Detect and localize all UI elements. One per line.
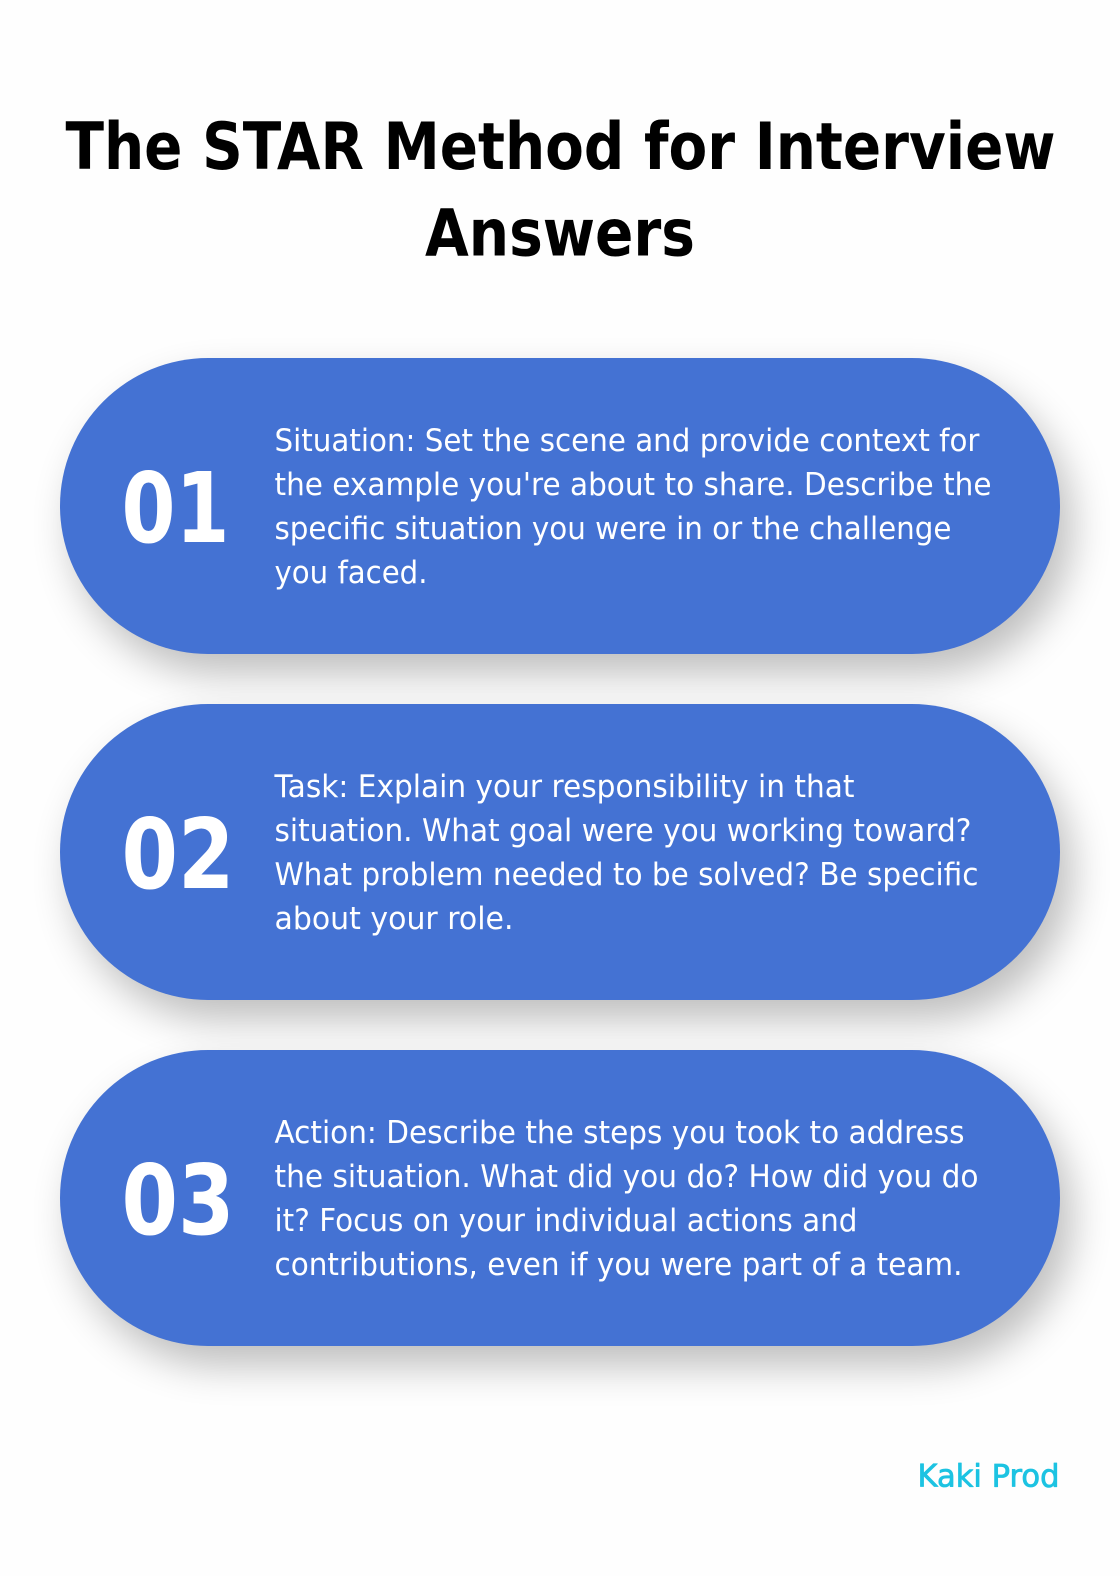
text: situation: Situation: Set the scene and provide context for xyxy=(274,423,980,459)
logo: Kaki Prod: Kaki Prod xyxy=(918,1458,1060,1494)
text: action: the situation. What did you do? How did you do xyxy=(274,1159,978,1195)
text: task: What problem needed to be solved? Be specific xyxy=(274,857,978,893)
number 01: 01 xyxy=(122,452,230,565)
text: action xyxy=(274,1115,978,1283)
number 03: 03 xyxy=(122,1144,234,1257)
text: task: about your role. xyxy=(274,901,514,937)
text: action: contributions, even if you were part of a team. xyxy=(274,1247,962,1283)
panel: step 01 situation xyxy=(60,358,1072,674)
number 02: 02 xyxy=(122,798,234,911)
panel: step 03 action xyxy=(60,1050,1072,1366)
text: situation: you faced. xyxy=(274,555,428,591)
text: task xyxy=(274,769,978,937)
text: situation: specific situation you were in or the challenge xyxy=(274,511,952,547)
text: task: situation. What goal were you working toward? xyxy=(274,813,972,849)
panel: step 02 task xyxy=(60,704,1072,1020)
title xyxy=(66,110,1056,272)
text: situation: the example you're about to share. Describe the xyxy=(274,467,992,503)
text: action: Action: Describe the steps you took to address xyxy=(274,1115,964,1151)
text: task: Task: Explain your responsibility in that xyxy=(274,769,854,805)
text: action: it? Focus on your individual actions and xyxy=(274,1203,858,1239)
title: Answers xyxy=(425,196,695,272)
text: situation xyxy=(274,423,992,591)
